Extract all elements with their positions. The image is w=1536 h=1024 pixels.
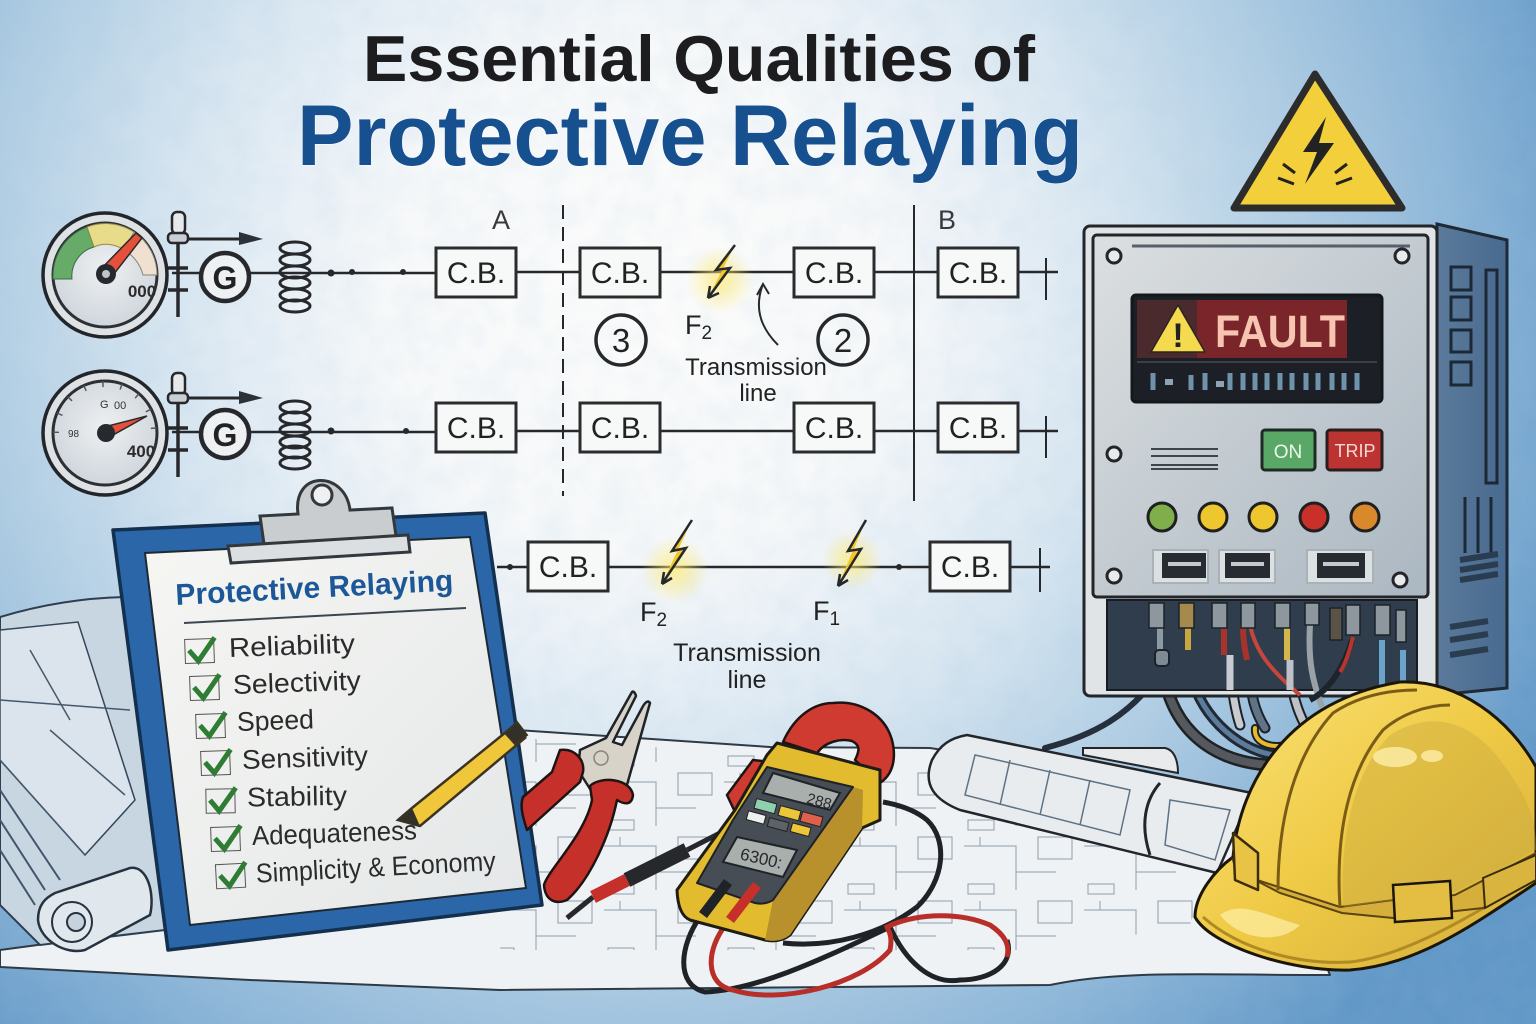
pencil [398, 722, 527, 826]
fault labels: F [813, 596, 830, 626]
checklist items: Simplicity & Economy [255, 846, 497, 889]
breaker labels: C.B. [591, 412, 649, 445]
gauge 1: 000 [128, 282, 156, 301]
single-line diagram [168, 205, 1058, 694]
checklist items [184, 629, 497, 891]
checklist items: Sensitivity [241, 741, 369, 775]
fault display: ! [1172, 317, 1184, 355]
fault labels [640, 310, 840, 694]
cabinet side [1437, 224, 1507, 695]
paper [145, 537, 526, 925]
trip button: TRIP [1334, 441, 1376, 461]
breaker labels: C.B. [447, 257, 505, 290]
fault labels: 1 [830, 609, 840, 630]
fault labels: line [728, 666, 766, 694]
vent lines [1151, 449, 1218, 469]
checklist items: Speed [236, 704, 314, 737]
fault labels: Transmission [673, 639, 821, 667]
breaker labels: C.B. [591, 257, 649, 290]
section labels: A [492, 205, 510, 235]
warning sign [1234, 74, 1402, 208]
zone numbers [596, 315, 868, 365]
zone numbers: 3 [612, 322, 630, 359]
title [297, 22, 1083, 184]
breaker labels: C.B. [941, 551, 999, 584]
title line 1: Essential Qualities of [363, 22, 1035, 95]
on button [1262, 430, 1315, 470]
fault bolts [641, 245, 882, 604]
generator 2: G [213, 417, 237, 453]
zone numbers: 2 [834, 322, 852, 359]
rolled blueprint [929, 735, 1252, 873]
probe leads [567, 802, 1009, 995]
gauge 2: 98 [68, 429, 80, 440]
breaker labels: C.B. [447, 412, 505, 445]
trip button [1327, 430, 1382, 470]
checklist items: Reliability [228, 629, 356, 663]
checklist heading: Protective Relaying [175, 564, 454, 612]
gauge 1 [43, 213, 167, 337]
breaker labels: C.B. [805, 257, 863, 290]
breaker labels: C.B. [949, 412, 1007, 445]
fault control panel [1045, 224, 1507, 765]
fault labels: 2 [656, 610, 667, 631]
pointer arrow [757, 284, 778, 345]
indicator lights [1148, 503, 1379, 531]
breaker labels [447, 257, 1007, 584]
wiring bay [1107, 600, 1417, 690]
blueprint sheet bottom [0, 730, 1330, 990]
clamp meter [677, 703, 894, 941]
nodes [328, 269, 902, 570]
fault labels: 2 [702, 323, 712, 344]
gauge 2: 400 [127, 442, 155, 461]
circuit breakers [436, 248, 1018, 591]
fault labels: F [640, 597, 656, 627]
fault labels: line [739, 380, 777, 407]
section labels: B [938, 205, 956, 235]
bus lines [172, 205, 1058, 592]
generator 1 [168, 212, 310, 317]
switches [1153, 550, 1373, 583]
fault display [1132, 295, 1382, 402]
checklist items: Stability [247, 781, 348, 813]
cabinet side vents [1451, 267, 1497, 553]
on button: ON [1274, 442, 1302, 463]
clipboard [113, 480, 542, 950]
gauge 2: G [100, 399, 109, 411]
checklist items: Adequateness [251, 815, 417, 851]
gauge 2 [43, 371, 167, 495]
title line 2: Protective Relaying [297, 88, 1083, 184]
cabling under cabinet [1045, 663, 1305, 765]
fault display: FAULT [1215, 306, 1345, 357]
pliers [522, 692, 650, 902]
generator 1: G [213, 260, 237, 296]
board [113, 513, 542, 950]
clamp meter: 6300: [738, 845, 784, 873]
breaker labels: C.B. [539, 551, 597, 584]
breaker labels: C.B. [805, 412, 863, 445]
clip [228, 480, 410, 563]
gauge 2: 00 [114, 400, 126, 412]
generator 2 [168, 373, 310, 477]
left blueprint book [0, 597, 165, 951]
breaker labels: C.B. [949, 257, 1007, 290]
section labels [492, 205, 956, 235]
clamp meter: 288 [805, 790, 833, 813]
cabinet front [1084, 226, 1437, 696]
fault labels: F [685, 310, 702, 340]
fault labels: Transmission [685, 354, 827, 381]
hard hat [1195, 682, 1536, 970]
screws [1107, 249, 1409, 587]
checklist items: Selectivity [232, 666, 362, 700]
